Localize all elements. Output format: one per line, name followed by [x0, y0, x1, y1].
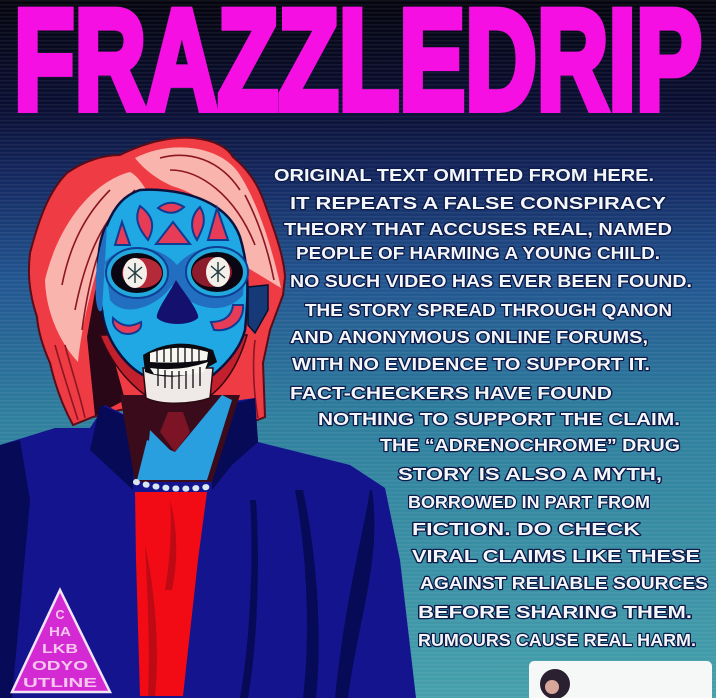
- footer tag: [529, 661, 712, 698]
- body text: factual note in original layout: [274, 165, 708, 650]
- body text: factual note in original layout: PEOPLE OF HARMING A YOUNG CHILD.: [296, 243, 660, 263]
- face: [98, 190, 247, 375]
- body text: factual note in original layout: ORIGINAL TEXT OMITTED FROM HERE.: [274, 165, 654, 185]
- body text: factual note in original layout: THEORY THAT ACCUSES REAL, NAMED: [284, 219, 672, 239]
- jacket folds and collar shading: [0, 398, 374, 698]
- body text: factual note in original layout: STORY IS ALSO A MYTH,: [398, 464, 662, 484]
- logo: magenta triangle: C: [55, 608, 65, 622]
- body text: factual note in original layout: BORROWED IN PART FROM: [408, 492, 650, 512]
- body text: factual note in original layout: FACT-CHECKERS HAVE FOUND: [290, 383, 612, 403]
- logo: magenta triangle: LKB: [42, 642, 78, 656]
- chin: [143, 368, 213, 403]
- logo: magenta triangle: HA: [49, 625, 71, 639]
- logo: magenta triangle: [12, 590, 110, 692]
- red shirt: [135, 492, 207, 696]
- body text: factual note in original layout: VIRAL CLAIMS LIKE THESE: [412, 546, 700, 566]
- right eye: [186, 247, 248, 297]
- body text: factual note in original layout: NOTHING TO SUPPORT THE CLAIM.: [318, 409, 680, 429]
- body text: factual note in original layout: BEFORE SHARING THEM.: [418, 602, 692, 622]
- ear: [248, 285, 268, 333]
- logo: magenta triangle: ODYO: [32, 659, 88, 673]
- body text: factual note in original layout: THE “ADRENOCHROME” DRUG: [380, 435, 680, 455]
- hair: [29, 138, 285, 425]
- jacket: [0, 398, 416, 698]
- illustration: masked figure: [0, 138, 416, 698]
- hair inner shadow: [87, 263, 125, 416]
- body text: factual note in original layout: FICTION. DO CHECK: [412, 519, 640, 539]
- scarf: [137, 395, 232, 480]
- body text: factual note in original layout: AGAINST RELIABLE SOURCES: [420, 573, 708, 593]
- body text: factual note in original layout: THE STORY SPREAD THROUGH QANON: [305, 300, 672, 320]
- body text: factual note in original layout: AND ANONYMOUS ONLINE FORUMS,: [290, 327, 648, 347]
- necklace: [136, 482, 207, 489]
- forehead ring shading: [96, 225, 245, 311]
- left eye: [106, 248, 168, 298]
- forehead markings: [115, 203, 228, 245]
- body text: factual note in original layout: WITH NO EVIDENCE TO SUPPORT IT.: [292, 354, 650, 374]
- teeth: [143, 344, 217, 377]
- neck: [120, 395, 240, 482]
- body text: factual note in original layout: IT REPEATS A FALSE CONSPIRACY: [290, 193, 666, 213]
- jowls: [100, 335, 247, 396]
- body text: factual note in original layout: RUMOURS CAUSE REAL HARM.: [418, 630, 696, 650]
- body text: factual note in original layout: NO SUCH VIDEO HAS EVER BEEN FOUND.: [290, 271, 692, 291]
- nose: [157, 280, 198, 324]
- cheek markings: [113, 305, 243, 334]
- logo: magenta triangle: UTLINE: [23, 676, 97, 690]
